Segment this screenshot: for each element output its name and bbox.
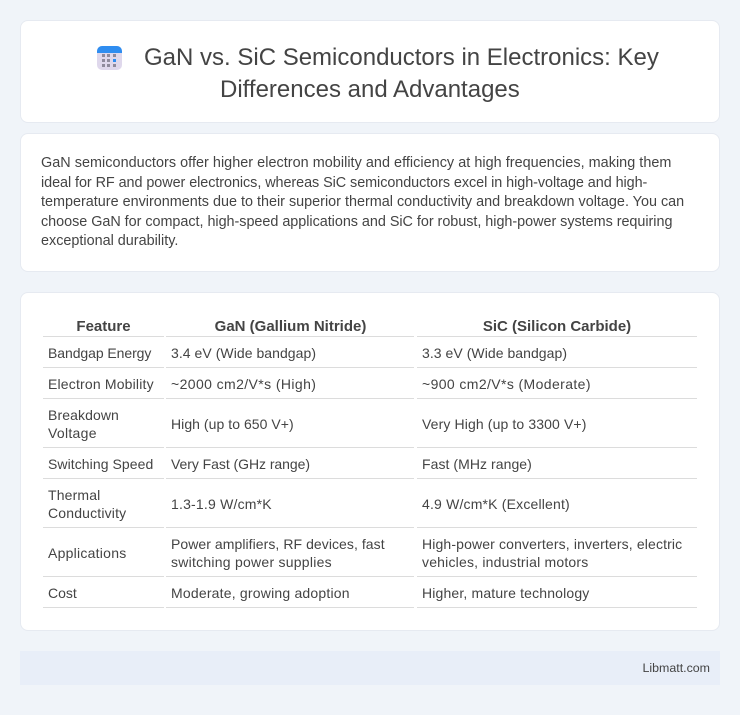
- intro text: [41, 155, 684, 249]
- row: applications: Applications: [48, 545, 126, 561]
- row: breakdown voltage: Very High (up to 3300 V+): [422, 416, 586, 432]
- intro text: ideal for RF and power electronics, whereas SiC semiconductors excel in high-voltage and high-: [41, 174, 647, 190]
- row: bandgap energy: Bandgap Energy: [48, 345, 151, 361]
- intro text: temperature environments due to their superior thermal conductivity and breakdown voltage. You can: [41, 194, 684, 210]
- row: switching speed: Very Fast (GHz range): [171, 456, 310, 472]
- row: thermal conductivity: Conductivity: [48, 505, 126, 521]
- title: [144, 44, 659, 103]
- row: bandgap energy: [48, 345, 567, 361]
- row: bandgap energy: 3.3 eV (Wide bandgap): [422, 345, 567, 361]
- row: thermal conductivity: 4.9 W/cm*K (Excellent): [422, 496, 570, 512]
- row: breakdown voltage: Voltage: [48, 425, 97, 441]
- row: thermal conductivity: Thermal: [48, 487, 100, 503]
- intro text: exceptional durability.: [41, 233, 178, 249]
- row: applications: vehicles, industrial motors: [422, 554, 588, 570]
- row: applications: [48, 536, 682, 570]
- row: breakdown voltage: High (up to 650 V+): [171, 416, 294, 432]
- table header: SiC (Silicon Carbide): [483, 318, 631, 335]
- title: GaN vs. SiC Semiconductors in Electronics: Key: [144, 44, 659, 71]
- row: applications: switching power supplies: [171, 554, 332, 570]
- row: applications: High-power converters, inverters, electric: [422, 536, 682, 552]
- row: bandgap energy: 3.4 eV (Wide bandgap): [171, 345, 316, 361]
- row: switching speed: [48, 456, 532, 472]
- footer text: Libmatt.com: [643, 661, 710, 675]
- row: breakdown voltage: Breakdown: [48, 407, 119, 423]
- table header: Feature: [76, 318, 131, 335]
- row: breakdown voltage: [48, 407, 586, 441]
- intro text: choose GaN for compact, high-speed applications and SiC for robust, high-power systems requiring: [41, 214, 672, 230]
- intro text: GaN semiconductors offer higher electron mobility and efficiency at high frequencies, making them: [41, 155, 671, 171]
- row: cost: Moderate, growing adoption: [171, 585, 350, 601]
- row: cost: Higher, mature technology: [422, 585, 589, 601]
- title: Differences and Advantages: [220, 76, 520, 103]
- panel: intro: [20, 133, 720, 272]
- table header: GaN (Gallium Nitride): [215, 318, 366, 335]
- row: electron mobility: ~2000 cm2/V*s (High): [171, 376, 316, 392]
- footer bar: [20, 651, 720, 685]
- panel: title card: [20, 20, 720, 123]
- row: electron mobility: [48, 376, 591, 392]
- row: thermal conductivity: 1.3-1.9 W/cm*K: [171, 496, 272, 512]
- table header: [76, 318, 631, 335]
- row: switching speed: Fast (MHz range): [422, 456, 532, 472]
- row: cost: [48, 585, 590, 601]
- row: switching speed: Switching Speed: [48, 456, 153, 472]
- row: thermal conductivity: [48, 487, 570, 521]
- row: electron mobility: ~900 cm2/V*s (Moderate): [422, 376, 591, 392]
- row: applications: Power amplifiers, RF devices, fast: [171, 536, 385, 552]
- row: electron mobility: Electron Mobility: [48, 376, 154, 392]
- panel: comparison table: [20, 292, 720, 631]
- icon: calendar: [97, 46, 122, 70]
- row: cost: Cost: [48, 585, 77, 601]
